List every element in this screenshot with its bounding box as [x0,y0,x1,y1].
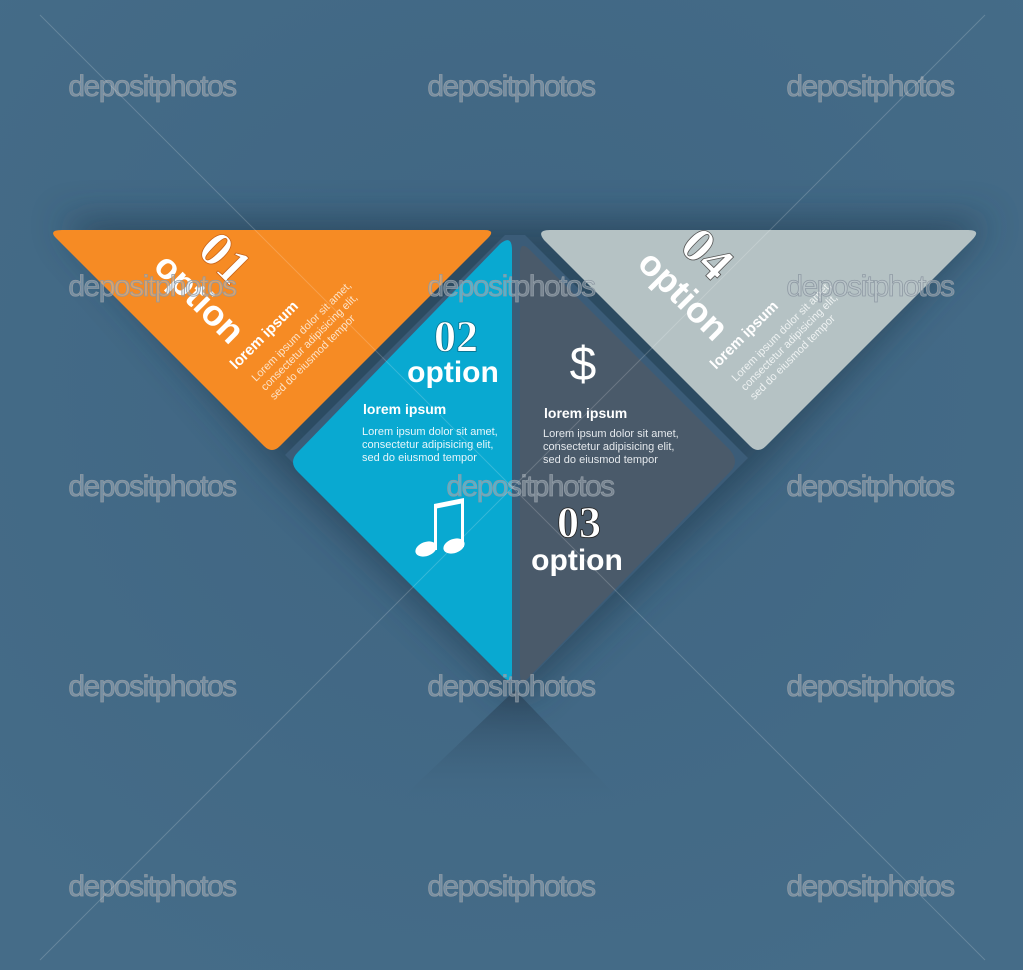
watermarks: depositphotos [446,470,614,503]
body text: sed do eiusmod tempor [748,312,838,403]
watermarks: depositphotos [68,470,236,503]
heading lorem ipsum: lorem ipsum [227,298,302,373]
watermarks [68,70,954,903]
watermarks: depositphotos [786,270,954,303]
body text: consectetur adipisicing elit, [543,441,674,453]
body text: Lorem ipsum dolor sit amet, [362,426,498,438]
shadow [60,220,990,800]
panel: option 04 grey [541,216,976,450]
watermarks: depositphotos [786,70,954,103]
watermarks: depositphotos [786,470,954,503]
heading lorem ipsum: lorem ipsum [544,405,627,421]
watermarks: depositphotos [427,270,595,303]
body text: sed do eiusmod tempor [362,452,477,464]
watermarks: depositphotos [68,70,236,103]
label option: option [146,245,253,351]
body text: Lorem ipsum dolor sit amet, [543,428,679,440]
body text: consectetur adipisicing elit, [739,292,840,393]
icon: dollar: $ [570,338,596,391]
watermarks: depositphotos [427,70,595,103]
body text: sed do eiusmod tempor [268,312,358,403]
watermarks: depositphotos [786,870,954,903]
panel: option 02 blue [293,240,512,680]
icon: music note [413,498,467,559]
label option: option [407,356,499,389]
backing strip [285,235,748,690]
heading lorem ipsum: lorem ipsum [707,298,782,373]
watermarks: depositphotos [786,670,954,703]
label option: option [630,242,737,348]
watermarks: depositphotos [427,870,595,903]
label option: option [531,544,623,577]
number 02: 02 [434,312,478,361]
watermarks: depositphotos [427,670,595,703]
heading lorem ipsum: lorem ipsum [363,401,446,417]
panel: option 01 orange [53,220,491,450]
body text: sed do eiusmod tempor [543,454,658,466]
body text: Lorem ipsum dolor sit amet, [250,280,354,384]
number 01: 01 [188,220,263,295]
body text: consectetur adipisicing elit, [362,439,493,451]
number 04: 04 [670,216,745,291]
number 03: 03 [557,498,601,547]
body text: Lorem ipsum dolor sit amet, [730,280,834,384]
body text: consectetur adipisicing elit, [259,292,360,393]
watermarks: depositphotos [68,670,236,703]
watermarks: depositphotos [68,870,236,903]
watermarks: depositphotos [68,270,236,303]
panel: option 03 dark [520,246,735,682]
